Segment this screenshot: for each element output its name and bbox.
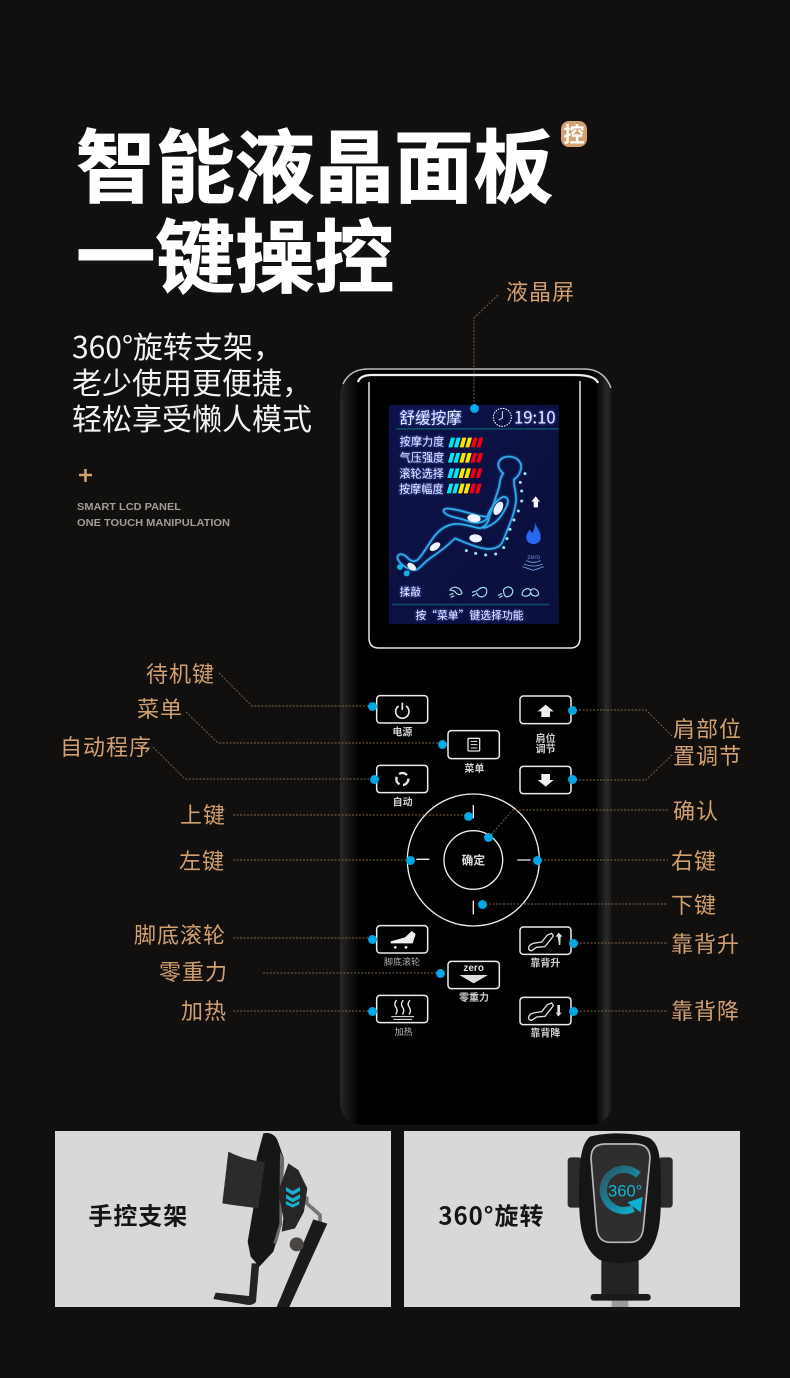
button: menu — [448, 731, 499, 775]
callout labels: 置调节 — [673, 739, 742, 771]
callout labels: 上键 — [180, 798, 226, 830]
panel label: 360°旋转 — [438, 1196, 544, 1231]
icon: zero waves: zero — [527, 554, 540, 561]
badge: 控: 控 — [564, 119, 584, 149]
title — [76, 104, 553, 309]
LCD screen — [389, 404, 559, 624]
massage points — [397, 500, 505, 576]
icon: zero waves — [522, 554, 544, 570]
button: heat: 加热 — [395, 1025, 413, 1038]
holder plate edge — [273, 1152, 284, 1243]
screen bezel — [369, 381, 580, 648]
button: menu: 菜单 — [464, 760, 484, 775]
inner highlight — [358, 375, 598, 383]
callout labels: 脚底滚轮 — [134, 918, 226, 950]
LCD settings rows: 气压强度 — [400, 449, 444, 465]
callout labels: 靠背降 — [671, 994, 740, 1026]
holder shell — [579, 1133, 661, 1263]
holder back plate — [248, 1133, 284, 1267]
icon: flame — [526, 523, 541, 544]
roller track dots — [465, 472, 526, 556]
callout labels: 液晶屏 — [506, 275, 575, 307]
button: power — [377, 696, 428, 738]
mode label: 揉敲 — [400, 585, 421, 600]
button: auto: 自动 — [393, 793, 413, 808]
rotation arrow — [603, 1169, 643, 1212]
holder L bracket — [213, 1263, 259, 1305]
holder side arms — [568, 1157, 673, 1208]
top highlight — [343, 369, 611, 388]
callout labels: 左键 — [179, 844, 225, 876]
direction wheel: 确定 — [462, 851, 485, 868]
LCD header — [399, 404, 556, 428]
button: foot roller: 脚底滚轮 — [384, 955, 420, 968]
english subtitle — [77, 501, 230, 529]
button: shoulder up — [520, 696, 571, 755]
LCD header: 19:10 — [514, 404, 556, 428]
mode icons — [449, 587, 539, 598]
remote control — [340, 368, 612, 1125]
leader lines — [153, 295, 672, 1011]
callout labels: 菜单 — [137, 692, 183, 724]
direction wheel — [407, 794, 539, 926]
button: zero gravity: 零重力 — [459, 989, 489, 1004]
callout labels: 加热 — [181, 994, 227, 1026]
holder face — [591, 1144, 650, 1242]
LCD settings rows: 按摩幅度 — [399, 481, 444, 497]
panel: 360 rotation — [404, 1131, 740, 1307]
intro text: 轻松享受懒人模式 — [72, 395, 312, 439]
title: 智能液晶面板 — [76, 104, 553, 219]
holder tube and rod — [277, 1197, 327, 1307]
intro text — [72, 323, 312, 439]
button: backrest down — [520, 997, 571, 1039]
button: backrest up — [520, 927, 571, 970]
title: 一键操控 — [76, 194, 394, 309]
intro text: 360°旋转支架， — [72, 323, 283, 367]
button: backrest up: 靠背升 — [530, 955, 560, 970]
button: backrest down: 靠背降 — [530, 1024, 560, 1039]
button: zero gravity — [448, 961, 499, 1004]
body figure — [397, 457, 521, 570]
button: shoulder up: 肩位 — [536, 730, 556, 745]
holder knob — [278, 1163, 307, 1232]
intro text: 老少使用更便捷， — [72, 359, 312, 403]
english subtitle: SMART LCD PANEL — [77, 501, 182, 513]
rotation arrow: 360° — [608, 1182, 642, 1201]
remote body — [340, 368, 612, 1125]
LCD header: 舒缓按摩 — [399, 405, 462, 428]
panel: phone holder side view — [55, 1131, 391, 1307]
LCD settings rows: 滚轮选择 — [399, 465, 444, 481]
callout labels: 确认 — [673, 794, 719, 826]
holder neck — [591, 1260, 651, 1307]
button: heat — [377, 995, 428, 1038]
callout labels: 右键 — [671, 844, 717, 876]
LCD settings rows: 按摩力度 — [400, 433, 444, 449]
callout labels: 零重力 — [159, 955, 228, 987]
holder clip arm — [222, 1152, 265, 1208]
remote buttons — [377, 696, 571, 1039]
icon: plus — [79, 469, 92, 482]
callout labels — [60, 275, 742, 1026]
button: power: 电源 — [392, 723, 412, 738]
callout labels: 下键 — [671, 888, 717, 920]
button: shoulder down — [520, 766, 571, 794]
button: auto — [377, 765, 428, 808]
panel label: 手控支架 — [88, 1196, 188, 1231]
callout labels: 自动程序 — [60, 730, 152, 762]
button: shoulder up: 调节 — [536, 740, 556, 755]
callout dots — [368, 404, 578, 1016]
LCD footer text: 按“菜单”键选择功能 — [415, 607, 524, 623]
callout labels: 肩部位 — [673, 712, 742, 744]
icon: up arrow — [531, 496, 540, 507]
english subtitle: ONE TOUCH MANIPULATION — [77, 517, 230, 529]
button: foot roller — [377, 926, 428, 968]
callout labels: 靠背升 — [671, 927, 740, 959]
callout labels: 待机键 — [146, 657, 215, 689]
button: zero gravity: zero — [463, 963, 484, 974]
LCD settings rows — [399, 433, 483, 497]
